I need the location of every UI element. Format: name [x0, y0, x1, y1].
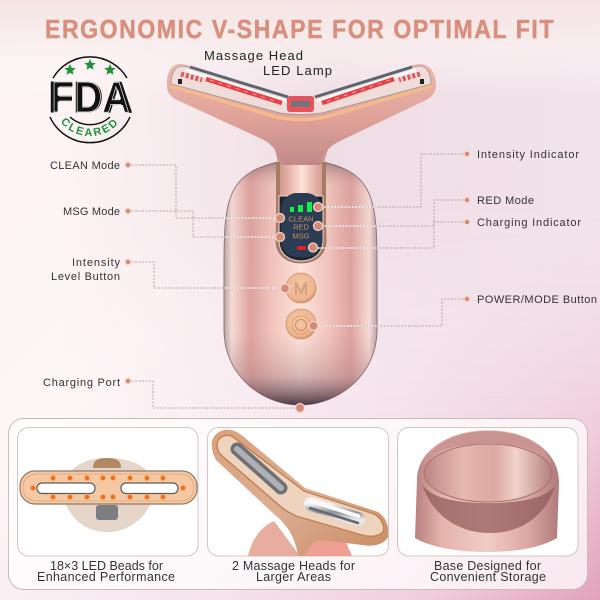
FDA cleared logo: FDA — [52, 73, 130, 122]
glass top edge — [190, 67, 412, 97]
device body — [224, 162, 377, 405]
display screen: MSG — [292, 232, 310, 240]
card: LED beads: Enhanced Performance — [37, 570, 175, 584]
screen niche — [276, 162, 326, 263]
card: massage heads: Larger Areas — [256, 570, 331, 584]
FDA cleared logo: CLEARED — [62, 118, 116, 136]
base lip — [422, 484, 555, 533]
label: LED lamp: LED Lamp — [263, 63, 332, 78]
rear housing — [66, 458, 150, 532]
LED glass window — [171, 66, 431, 114]
base ball — [248, 521, 300, 556]
device — [167, 64, 436, 405]
power button — [286, 309, 316, 339]
display screen: RED — [293, 222, 309, 232]
caption: Base Designed for — [434, 559, 541, 573]
FDA cleared logo: FDA — [48, 73, 132, 122]
M button: M — [294, 279, 308, 298]
card: massage heads — [208, 428, 389, 584]
card: base: Convenient Storage — [430, 570, 546, 584]
base bowl — [424, 444, 552, 502]
caption: 18×3 LED Beads for — [50, 559, 163, 573]
callout dots — [125, 151, 470, 412]
center LED cluster — [287, 96, 314, 112]
panel: features — [8, 418, 588, 590]
LED bar — [20, 471, 197, 504]
display screen: CLEAN — [288, 214, 314, 224]
red LED strips — [206, 79, 394, 103]
label: massage head: Massage Head — [204, 48, 303, 63]
right callout labels: Charging Indicator — [477, 217, 581, 229]
LED beads — [30, 475, 186, 500]
massage head shell — [167, 64, 436, 165]
heating plates — [237, 449, 281, 488]
right callout labels: POWER/MODE Button — [477, 294, 597, 306]
right callout labels: RED Mode — [477, 195, 534, 207]
display screen — [281, 193, 322, 257]
right callout labels — [477, 149, 597, 306]
Y head — [212, 430, 389, 556]
M button — [286, 273, 316, 303]
left callout labels: CLEAN Mode — [50, 160, 120, 172]
corner markers — [178, 79, 424, 84]
caption: 2 Massage Heads for — [232, 559, 355, 573]
left callout labels: Charging Port — [43, 377, 120, 389]
leader lines — [224, 207, 377, 326]
orange rim — [171, 86, 432, 120]
FDA cleared logo — [48, 56, 132, 144]
left callout labels: Intensity — [72, 257, 120, 269]
base body — [415, 430, 559, 552]
card: LED beads — [18, 428, 198, 584]
left callout labels: MSG Mode — [63, 206, 120, 218]
left callout labels: Level Button — [51, 271, 120, 283]
left callout labels — [43, 160, 120, 389]
right callout labels: Intensity Indicator — [477, 149, 579, 161]
neck — [270, 142, 334, 200]
card: base — [398, 428, 578, 584]
